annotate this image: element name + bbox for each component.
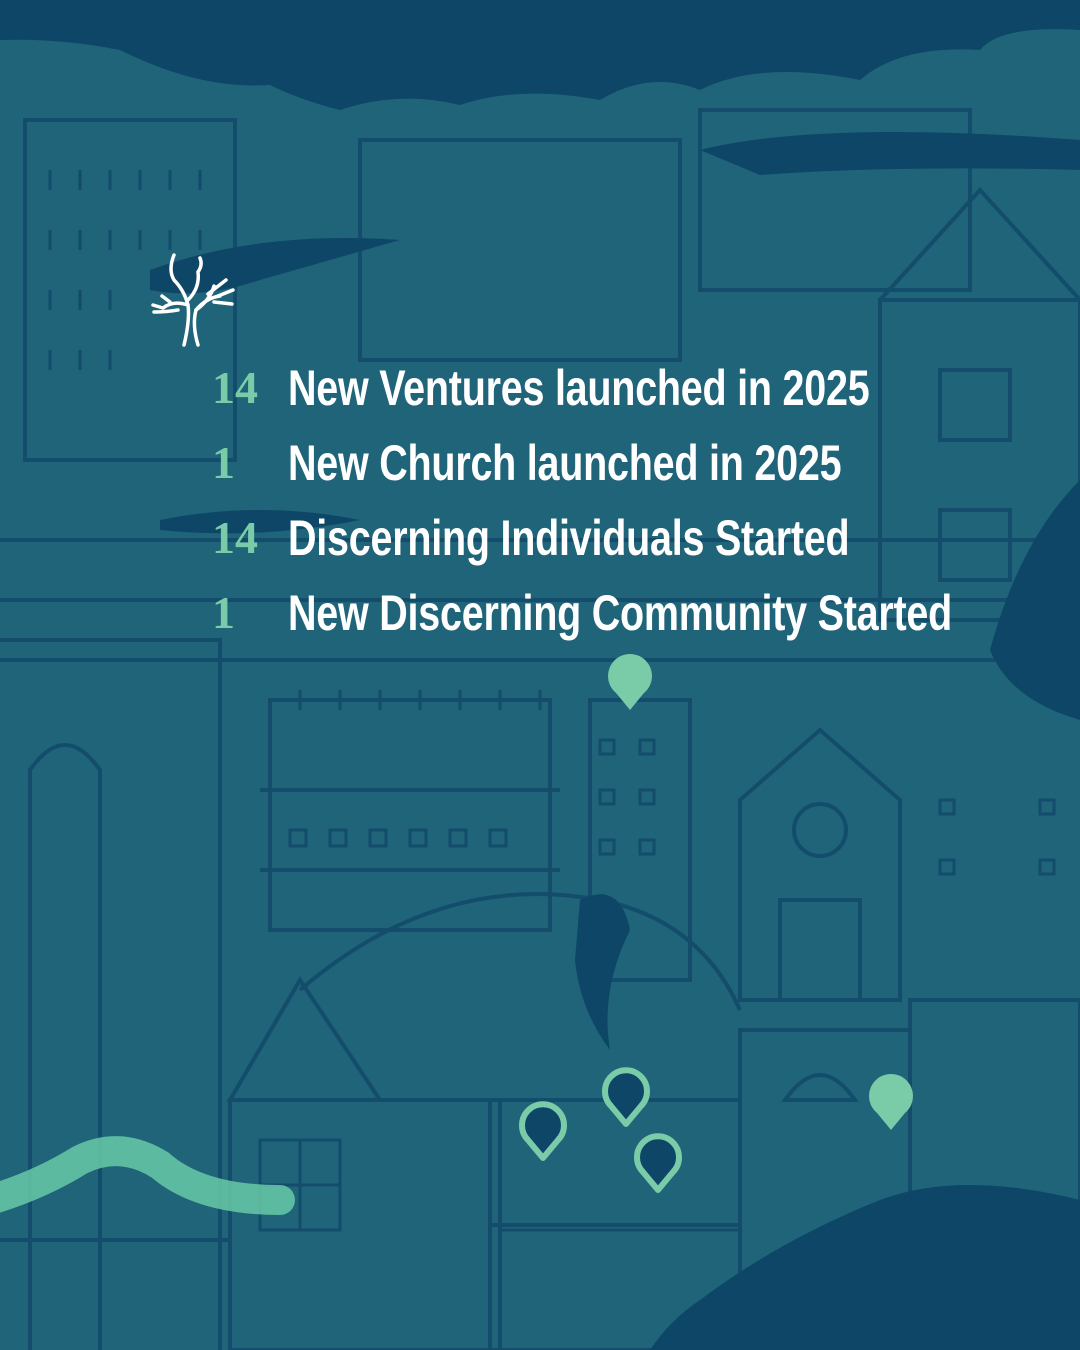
pin: filled right	[869, 1074, 913, 1130]
pin: filled top	[608, 654, 652, 710]
stats list	[212, 360, 952, 641]
stat: church: 1	[212, 437, 235, 488]
icon: tree logo	[151, 253, 235, 347]
stat: church: New Church launched in 2025	[288, 435, 841, 491]
stat: ventures: New Ventures launched in 2025	[288, 360, 869, 416]
stat: ventures: 14	[212, 362, 258, 413]
stat: discerning community: New Discerning Community Started	[288, 585, 952, 641]
stat: discerning individuals: 14	[212, 512, 258, 563]
stat: discerning community: 1	[212, 587, 235, 638]
stat: discerning individuals: Discerning Individuals Started	[288, 510, 849, 566]
pin: outlined group	[522, 1070, 679, 1190]
